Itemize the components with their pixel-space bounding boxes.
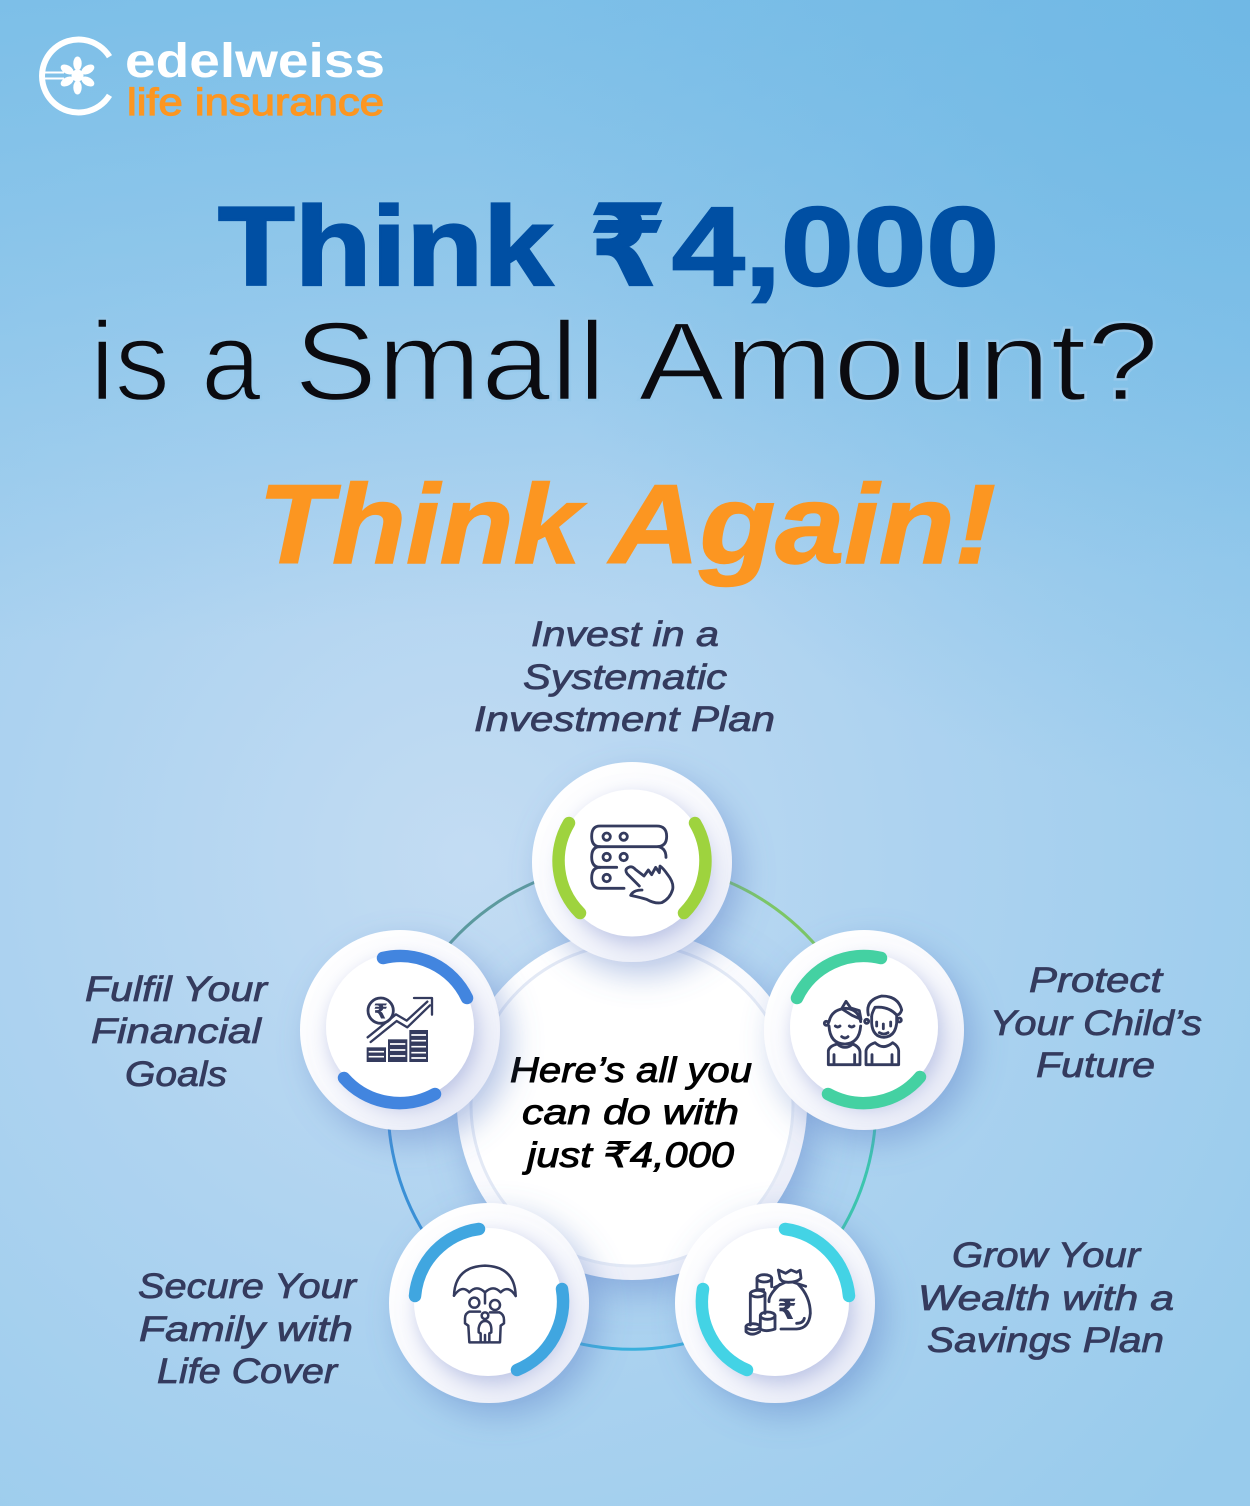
node: financial goals <box>300 930 500 1130</box>
blue arcs <box>344 956 467 1103</box>
label: financial goals: Financial <box>91 1012 262 1051</box>
icon: logo flower in open circle <box>42 39 110 112</box>
icon: rupee growth chart <box>367 998 432 1062</box>
title: is a Small Amount?: is <box>90 299 170 424</box>
icon: two children <box>824 996 902 1065</box>
label: systematic investment plan: Invest in a <box>531 615 719 654</box>
logo: edelweiss life insurance <box>42 35 385 124</box>
icon: family under umbrella <box>454 1266 516 1342</box>
label: financial goals: Goals <box>125 1055 227 1094</box>
center text: just ₹4,000 <box>522 1136 735 1175</box>
title: Think Again!: Again! <box>607 462 996 587</box>
label: financial goals <box>85 970 269 1094</box>
label: savings plan <box>918 1236 1174 1360</box>
title: Think ₹4,000: 4,000 <box>672 184 999 309</box>
label: child's future: Protect <box>1029 961 1164 1000</box>
label: child's future: Future <box>1036 1046 1155 1085</box>
node: systematic investment plan <box>532 762 732 962</box>
center text <box>510 1051 752 1175</box>
label: life cover <box>138 1267 358 1391</box>
label: life cover: Family with <box>139 1310 353 1349</box>
icon: money bag and coins <box>746 1270 810 1334</box>
label: systematic investment plan <box>474 615 775 739</box>
teal arcs <box>797 956 920 1103</box>
title: is a Small Amount?: Small <box>294 299 606 424</box>
title: Think ₹4,000 <box>218 184 999 309</box>
green arcs <box>559 823 705 913</box>
label: systematic investment plan: Investment Plan <box>474 700 775 739</box>
label: life cover: Life Cover <box>157 1352 339 1391</box>
center disc <box>457 930 807 1280</box>
center text: Here’s all you <box>510 1051 752 1090</box>
node: savings plan <box>675 1203 875 1403</box>
center text: can do with <box>522 1093 739 1132</box>
logo wordmark: edelweiss <box>125 35 385 88</box>
cyan arcs <box>702 1229 849 1370</box>
logo tagline: life insurance <box>127 82 384 124</box>
node: life cover <box>389 1203 589 1403</box>
title: Think Again! <box>258 462 996 587</box>
icon: list with pointing hand <box>592 826 673 903</box>
label: life cover: Secure Your <box>138 1267 358 1306</box>
title: Think ₹4,000: ₹ <box>589 184 666 309</box>
label: systematic investment plan: Systematic <box>523 658 728 697</box>
label: child's future: Your Child’s <box>990 1004 1202 1043</box>
icon: rupee growth chart: ₹ <box>373 1000 388 1023</box>
node: child's future <box>764 930 964 1130</box>
label: child's future <box>990 961 1202 1085</box>
title: Think Again!: Think <box>258 462 586 587</box>
title: is a Small Amount?: a <box>201 299 262 424</box>
label: savings plan: Savings Plan <box>927 1321 1164 1360</box>
connecting ring <box>388 862 876 1349</box>
icon: money bag and coins: ₹ <box>777 1294 797 1325</box>
label: savings plan: Wealth with a <box>918 1279 1174 1318</box>
label: financial goals: Fulfil Your <box>85 970 269 1009</box>
title: is a Small Amount?: Amount? <box>638 299 1159 424</box>
title: Think ₹4,000: Think <box>218 184 554 309</box>
sky blue arcs <box>415 1229 563 1370</box>
title: is a Small Amount? <box>90 299 1159 424</box>
label: savings plan: Grow Your <box>952 1236 1142 1275</box>
